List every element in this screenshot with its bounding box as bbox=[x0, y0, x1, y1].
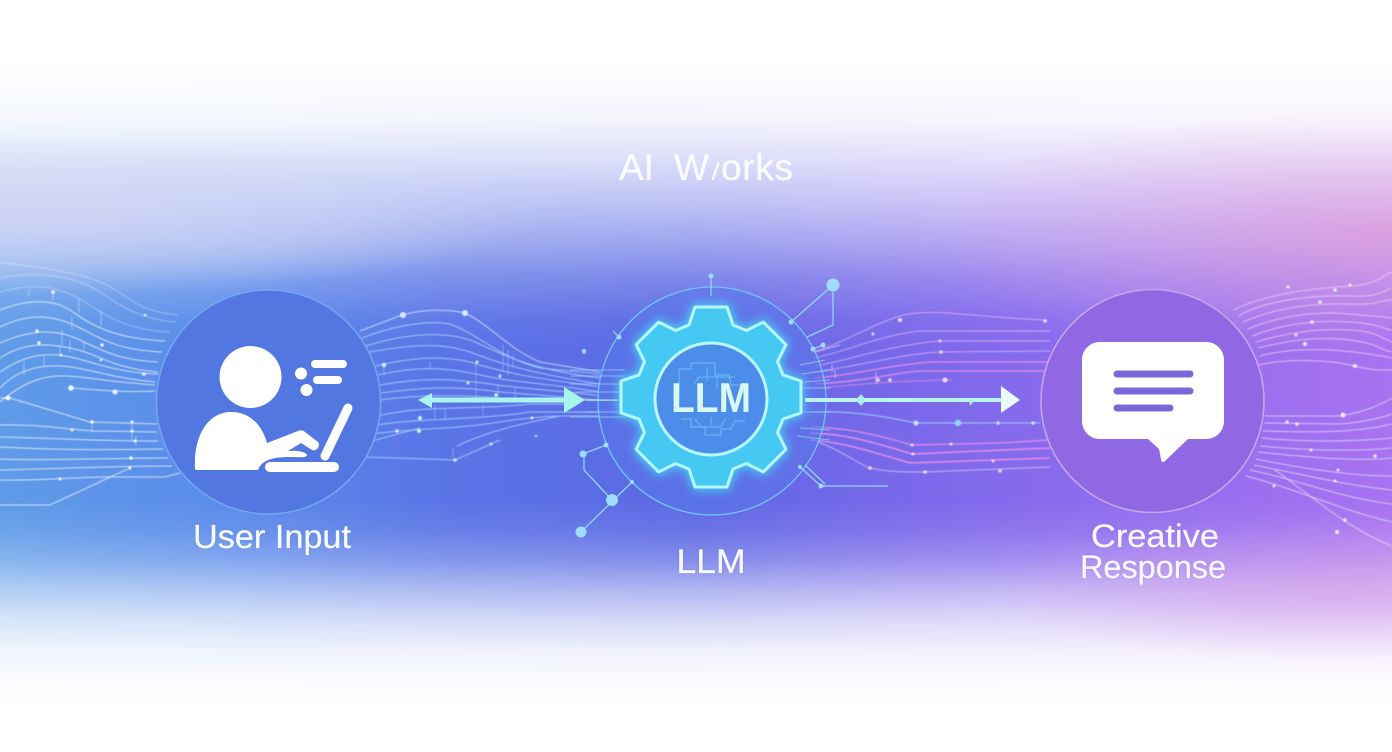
arrow: bidirectional input to LLM bbox=[418, 387, 617, 413]
icon: thought dots and bars bbox=[295, 360, 347, 396]
label: creative response bbox=[1080, 518, 1226, 585]
network branches bbox=[576, 274, 888, 538]
label: LLM: LLM bbox=[676, 543, 746, 581]
icon: body and arm bbox=[195, 412, 319, 470]
title bbox=[619, 147, 793, 188]
incoming lines bbox=[570, 360, 830, 440]
circle: creative response bbox=[1041, 290, 1264, 512]
label: creative response: Response bbox=[1080, 549, 1226, 585]
circle: user input bbox=[156, 290, 380, 514]
title: orks bbox=[721, 147, 793, 188]
icon: head bbox=[220, 346, 282, 408]
icon: user at laptop bbox=[195, 346, 348, 472]
icon: speech bubble bbox=[1082, 342, 1224, 462]
data lines: user input to LLM bbox=[360, 310, 600, 462]
label: creative response: Creative bbox=[1091, 518, 1219, 554]
arrow: LLM to response bbox=[805, 386, 1020, 413]
label: user input: User Input bbox=[193, 518, 351, 555]
data lines: LLM to creative response bbox=[810, 313, 1050, 474]
label: creative response: Creative bbox=[1091, 518, 1219, 554]
label: LLM: LLM bbox=[676, 543, 746, 581]
icon: laptop screen bbox=[325, 408, 348, 456]
gear label: LLM bbox=[671, 374, 751, 421]
icon: LLM gear bbox=[621, 307, 801, 487]
circuit brain bbox=[679, 363, 745, 435]
title: W bbox=[674, 147, 709, 188]
title: AI bbox=[619, 147, 654, 188]
label: creative response: Response bbox=[1080, 549, 1226, 585]
icon: keyboard bbox=[265, 462, 339, 472]
LLM ring and network bbox=[570, 274, 888, 538]
label: user input: User Input bbox=[193, 518, 351, 555]
data lines: far left bbox=[0, 262, 180, 505]
data lines: far right bbox=[1233, 272, 1392, 546]
